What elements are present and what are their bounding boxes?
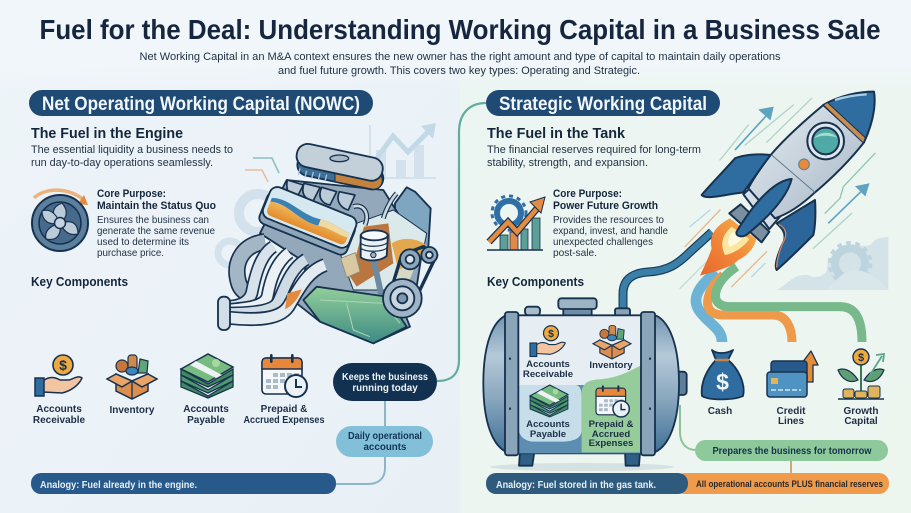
text: core purpose left: used to determine its: [97, 237, 189, 248]
shadow under tank: [490, 463, 674, 471]
tank cap: [563, 307, 592, 321]
text: core purpose left: Maintain the Status Quo: [97, 200, 216, 212]
icon: growth capital: [838, 349, 884, 427]
component: prepaid and accrued: Prepaid &: [261, 404, 307, 415]
rocket nose: [823, 92, 875, 142]
text: core purpose right: Power Future Growth: [553, 200, 658, 212]
text: core purpose right: Provides the resources to: [553, 215, 664, 226]
engine main block: [260, 180, 423, 343]
engine valve cover: [257, 184, 359, 257]
tank item: inventory: [589, 326, 633, 371]
tank item: accounts payable: Accounts: [526, 419, 570, 430]
connector: tank to prepares pill: [680, 405, 696, 450]
icon: growth capital: Growth: [844, 406, 878, 417]
text: core purpose right: Core Purpose:: [553, 188, 622, 200]
text: core purpose right: expand, invest, and handle: [553, 226, 668, 237]
rocket body: [748, 105, 864, 218]
pill: prepares the business for tomorrow: Prepares the business for tomorrow: [712, 446, 872, 457]
bar: left analogy: Analogy: Fuel already in the engine.: [40, 480, 197, 491]
text: core purpose left: purchase price.: [97, 248, 164, 259]
text: core purpose left: Ensures the business can: [97, 215, 209, 226]
icon: wheel: [32, 190, 88, 251]
tank item: accounts receivable: Receivable: [523, 369, 573, 380]
component: accounts payable: Payable: [187, 415, 225, 426]
bar: financial reserves: [675, 473, 889, 494]
decoration: faint chart and gears behind engine: [218, 123, 436, 265]
tank window: [517, 315, 643, 453]
text: core purpose left: [97, 188, 216, 259]
rocket light: [799, 159, 809, 170]
text: tank description: The financial reserves required for long-term: [487, 144, 701, 156]
title: Fuel for the Deal: Understanding Working Capital in a Business Sale: [40, 14, 880, 45]
component: accounts receivable: Receivable: [33, 415, 86, 426]
tank shell left and right: [483, 314, 510, 453]
engine belt and pulleys: [383, 247, 437, 318]
engine intake runners: [287, 180, 355, 210]
text: tank description: stability, strength, and expansion.: [487, 157, 648, 169]
rocket nozzle: [729, 204, 769, 242]
intro text: and fuel future growth. This covers two key types: Operating and Strategic.: [278, 65, 640, 77]
component: accounts receivable: Accounts: [36, 404, 82, 415]
rocket left fin: [702, 154, 771, 197]
flows: fuel streams to cash, credit and growth: [696, 267, 862, 342]
text: core purpose right: [553, 188, 668, 259]
text: engine description: [31, 144, 233, 169]
component: inventory: Inventory: [109, 405, 155, 416]
subheading: fuel in the tank: The Fuel in the Tank: [487, 125, 626, 142]
heading: NOWC: Net Operating Working Capital (NOWC): [42, 93, 360, 115]
icon: growth capital: Capital: [844, 416, 878, 427]
engine exhaust manifold: [225, 242, 325, 319]
icon: cash: [702, 350, 744, 417]
pill: daily operational accounts: [336, 426, 433, 457]
engine rear box: [395, 187, 431, 258]
icon: credit lines: Lines: [778, 416, 804, 427]
text: core purpose left: Core Purpose:: [97, 188, 166, 200]
pipe: tank to rocket: [623, 232, 712, 312]
component: accounts payable: [181, 354, 233, 426]
tank item: accounts receivable: [523, 326, 573, 380]
icon: credit lines: Credit: [777, 406, 806, 417]
text: core purpose left: generate the same revenue: [97, 226, 215, 237]
tank item: accounts payable: [526, 385, 570, 440]
text: engine description: run day-to-day operations seamlessly.: [31, 157, 213, 169]
engine oil pan: [303, 287, 407, 343]
panel: right background: [460, 0, 911, 513]
rocket collar: [743, 187, 780, 229]
bar: right analogy: [486, 473, 688, 494]
tank item: prepaid and accrued: Accrued: [592, 429, 630, 440]
engine silver tube: [353, 193, 397, 225]
rocket porthole: [807, 123, 844, 159]
component: inventory: [107, 355, 157, 416]
rocket flame: [700, 218, 756, 276]
text: engine description: The essential liquidity a business needs to: [31, 144, 233, 156]
icon: cash: Cash: [708, 406, 732, 417]
intro text: [140, 51, 781, 77]
engine glass chamber: [340, 210, 427, 290]
bar: left analogy: [31, 473, 336, 494]
icon: growth chart and gear: [487, 196, 545, 250]
text: core purpose right: post-sale.: [553, 248, 597, 259]
icon: credit lines: [767, 351, 818, 427]
engine piston: [361, 231, 388, 260]
intro text: Net Working Capital in an M&A context ensures the new owner has the right amount and type of capital to maintain daily operations: [140, 51, 781, 63]
rocket centre fin: [736, 179, 792, 236]
text: tank description: [487, 144, 701, 169]
tank legs: [519, 452, 640, 466]
subheading: fuel in the engine: The Fuel in the Engine: [31, 125, 183, 142]
heading: key components left: Key Components: [31, 275, 128, 289]
bar: right analogy: Analogy: Fuel stored in the gas tank.: [496, 480, 656, 491]
engine connecting rod: [370, 258, 382, 303]
tank side valve: [675, 372, 687, 395]
icon: cash: $: [716, 369, 729, 395]
heading: key components right: Key Components: [487, 275, 584, 289]
tank straps: [505, 312, 518, 455]
icon: growth capital: $: [858, 352, 864, 364]
panel: left background: [0, 0, 460, 513]
tank item: prepaid and accrued: Expenses: [589, 438, 633, 449]
engine exhaust tip highlight: [285, 289, 302, 309]
connector: prepares to bar: [790, 461, 792, 474]
engine faded piston: [341, 253, 360, 277]
tank item: prepaid and accrued: Prepaid &: [589, 419, 633, 430]
component: accounts receivable: [33, 355, 86, 426]
pill: keeps the business running today: [333, 363, 437, 401]
pill: daily operational accounts: accounts: [363, 442, 407, 453]
pill: keeps the business running today: running today: [352, 383, 418, 394]
tank small fittings: [525, 307, 540, 315]
pill: keeps the business running today: Keeps the business: [342, 372, 429, 383]
illustration: engine: [218, 142, 437, 343]
component: prepaid and accrued: [244, 354, 325, 426]
engine brown liner: [350, 223, 393, 287]
engine exhaust flange: [218, 297, 230, 330]
heading: strategic working capital: Strategic Working Capital: [499, 93, 707, 115]
component: prepaid and accrued: Accrued Expenses: [244, 415, 325, 426]
pill: daily operational accounts: Daily operational: [348, 431, 422, 442]
component: accounts payable: Accounts: [183, 404, 229, 415]
rocket right fin: [776, 200, 815, 270]
tank item: inventory: Inventory: [589, 360, 633, 371]
tank item: accounts payable: Payable: [530, 429, 566, 440]
connector: keeps pill to strategic heading: [437, 103, 486, 381]
illustration: rocket: [700, 92, 875, 276]
pill: prepares the business for tomorrow: [695, 440, 888, 461]
connector: left vertical: [336, 400, 385, 484]
decoration: cloud, gear and speed lines: [680, 98, 888, 290]
tank item: accounts receivable: Accounts: [526, 359, 570, 370]
engine air filter: [295, 142, 385, 192]
tank item: prepaid and accrued: [589, 385, 633, 449]
arrows: rising accents: [735, 108, 868, 223]
text: core purpose right: unexpected challenges: [553, 237, 653, 248]
illustration: tank: [483, 298, 687, 466]
